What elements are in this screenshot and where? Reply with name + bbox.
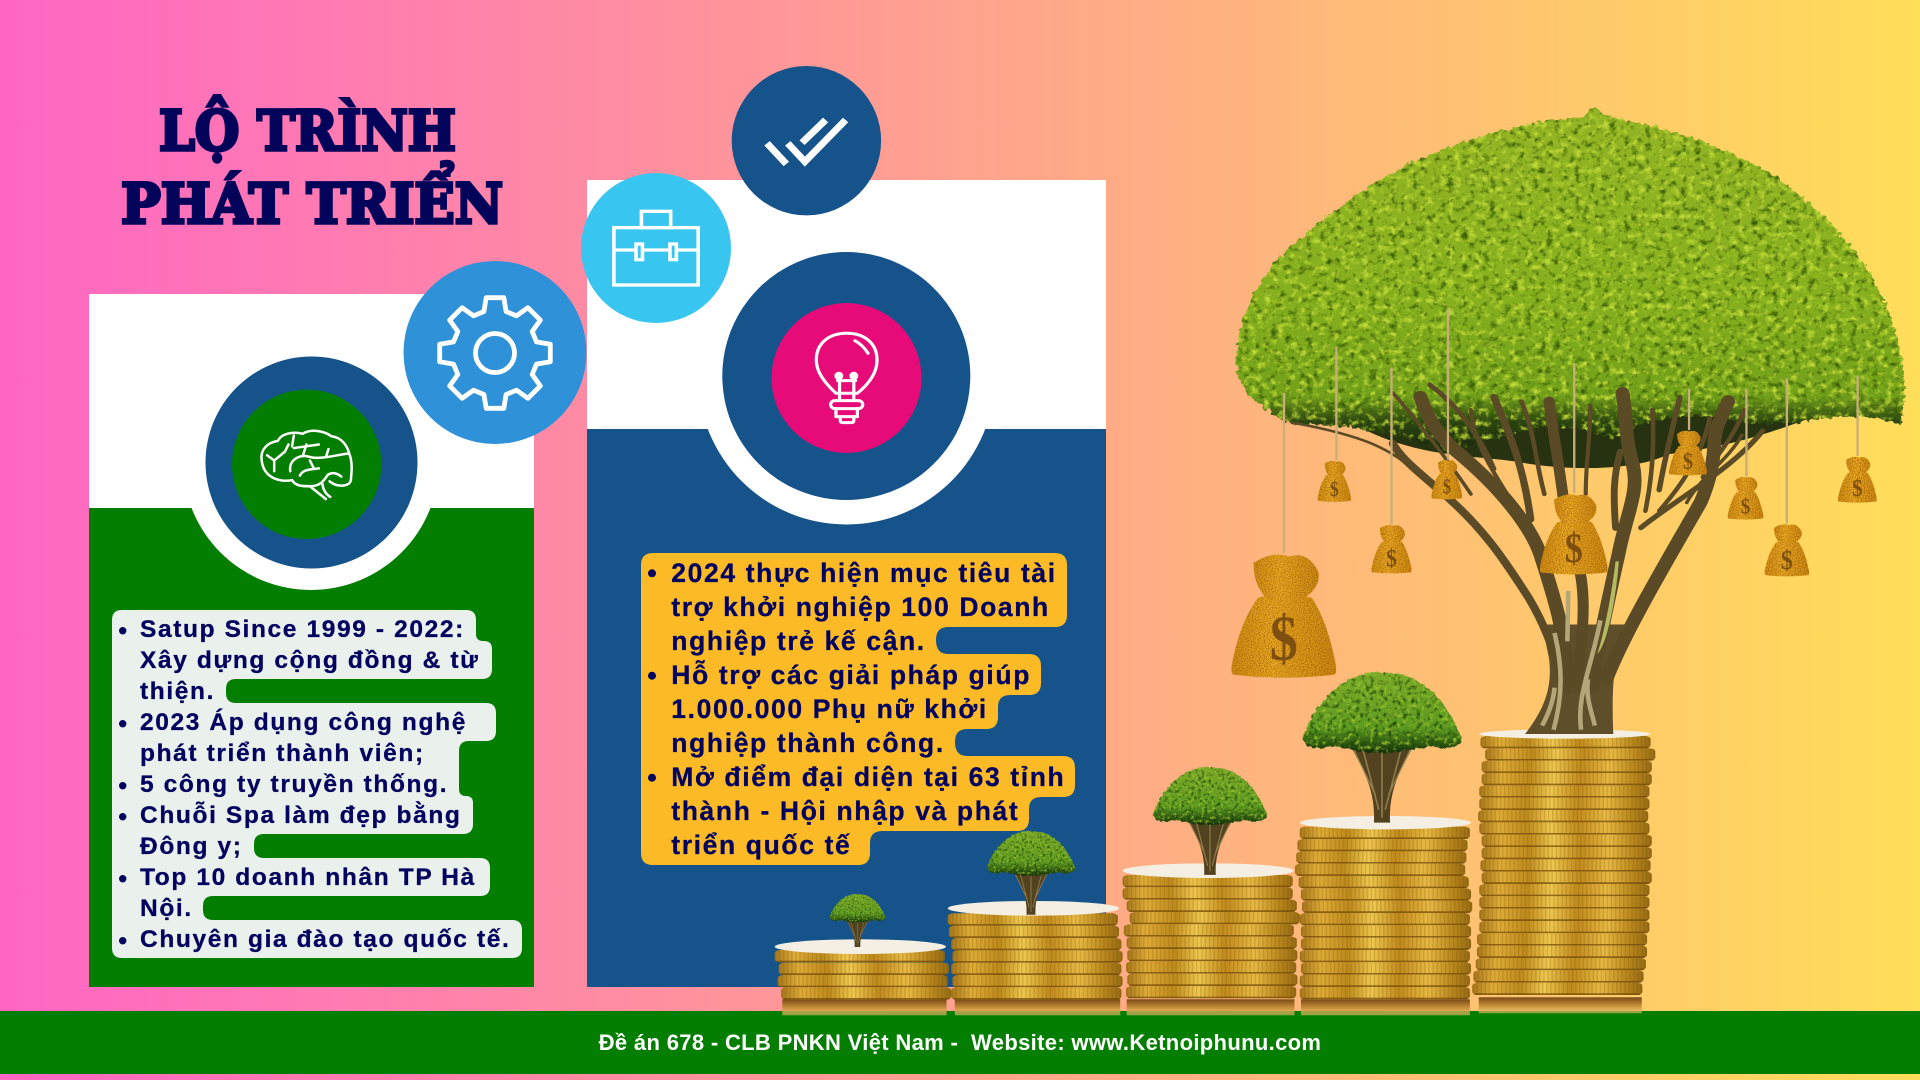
text block: 2024 goals	[671, 558, 1065, 860]
footer bar: Đề án 678 - CLB PNKN Việt Nam - Website: www.Ketnoiphunu.com	[599, 1030, 1321, 1055]
money bags: $	[1330, 477, 1339, 501]
text block: milestones 1999-2023: 5 công ty truyền thống.	[140, 770, 448, 798]
text block: milestones 1999-2023: thiện.	[140, 678, 215, 704]
text block: milestones 1999-2023: Chuỗi Spa làm đẹp bằng	[140, 802, 462, 828]
text block: 2024 goals: 1.000.000 Phụ nữ khởi	[671, 694, 988, 724]
trunk base	[1525, 625, 1625, 734]
money bags	[1231, 431, 1877, 678]
text block: 2024 goals: nghiệp thành công.	[671, 728, 945, 758]
panel: 1999-2023 green card	[89, 294, 534, 987]
text block: 2024 goals: nghiệp trẻ kế cận.	[671, 626, 926, 656]
money bags: $	[1852, 475, 1863, 501]
illustration: small tree 3	[1153, 767, 1267, 875]
text block: milestones 1999-2023	[140, 616, 510, 952]
canopy	[1236, 107, 1904, 452]
text block: milestones 1999-2023: Satup Since 1999 - 2022:	[140, 616, 465, 642]
text block: 2024 goals: 2024 thực hiện mục tiêu tài	[671, 558, 1057, 588]
bright leaf streak	[1597, 561, 1619, 654]
money bags: $	[1270, 603, 1298, 675]
reflections under stacks	[782, 997, 1642, 1015]
money bags: $	[1386, 545, 1397, 573]
icon: briefcase	[581, 173, 731, 323]
text block: milestones 1999-2023: Chuyên gia đào tạo quốc tế.	[140, 926, 510, 952]
coin stack 5	[1472, 729, 1655, 995]
trunk stems and branches	[1292, 385, 1763, 688]
money bags: $	[1781, 544, 1793, 575]
text block: milestones 1999-2023: Nội.	[140, 894, 193, 922]
text block: milestones 1999-2023: Xây dựng cộng đồng & từ	[140, 646, 480, 674]
text block: 2024 goals: Hỗ trợ các giải pháp giúp	[671, 660, 1031, 690]
footer bar	[0, 1011, 1920, 1074]
coin stack 1	[775, 939, 951, 1000]
money bags: $	[1683, 447, 1693, 474]
text block: 2024 goals: thành - Hội nhập và phát	[671, 796, 1019, 826]
title: PHÁT TRIỂN	[121, 162, 503, 236]
money bags: $	[1565, 526, 1583, 572]
icon: gear	[404, 261, 586, 444]
text block: 2024 goals: triển quốc tế	[671, 830, 851, 860]
illustration: money tree	[1231, 107, 1904, 734]
title	[121, 96, 503, 236]
dark underside of canopy	[1338, 414, 1820, 468]
illustration: small tree 2	[987, 831, 1075, 915]
coin stack 4	[1295, 816, 1472, 999]
illustration: small tree 4	[1303, 672, 1461, 823]
illustration: small tree 1	[830, 894, 885, 947]
illustration: coin stacks	[775, 729, 1655, 1015]
money bags: $	[1443, 476, 1451, 499]
coin stack 2	[948, 901, 1123, 1000]
icon: double check mark	[732, 66, 881, 215]
panel: 2024 goals blue card	[587, 180, 1106, 987]
text block: milestones 1999-2023: phát triển thành viên;	[140, 740, 425, 766]
money bags: $	[1741, 494, 1750, 519]
text block: milestones 1999-2023: Đông y;	[140, 832, 243, 860]
text block: 2024 goals: Mở điểm đại diện tại 63 tỉnh	[671, 762, 1065, 792]
money bag strings	[1284, 309, 1858, 553]
bark highlights	[1542, 591, 1600, 730]
text block: 2024 goals: trợ khởi nghiệp 100 Doanh	[671, 592, 1050, 622]
text block: milestones 1999-2023: Top 10 doanh nhân TP Hà	[140, 864, 476, 890]
title: LỘ TRÌNH	[159, 96, 456, 163]
text block: milestones 1999-2023: 2023 Áp dụng công nghệ	[140, 708, 467, 736]
coin stack 3	[1123, 863, 1300, 998]
